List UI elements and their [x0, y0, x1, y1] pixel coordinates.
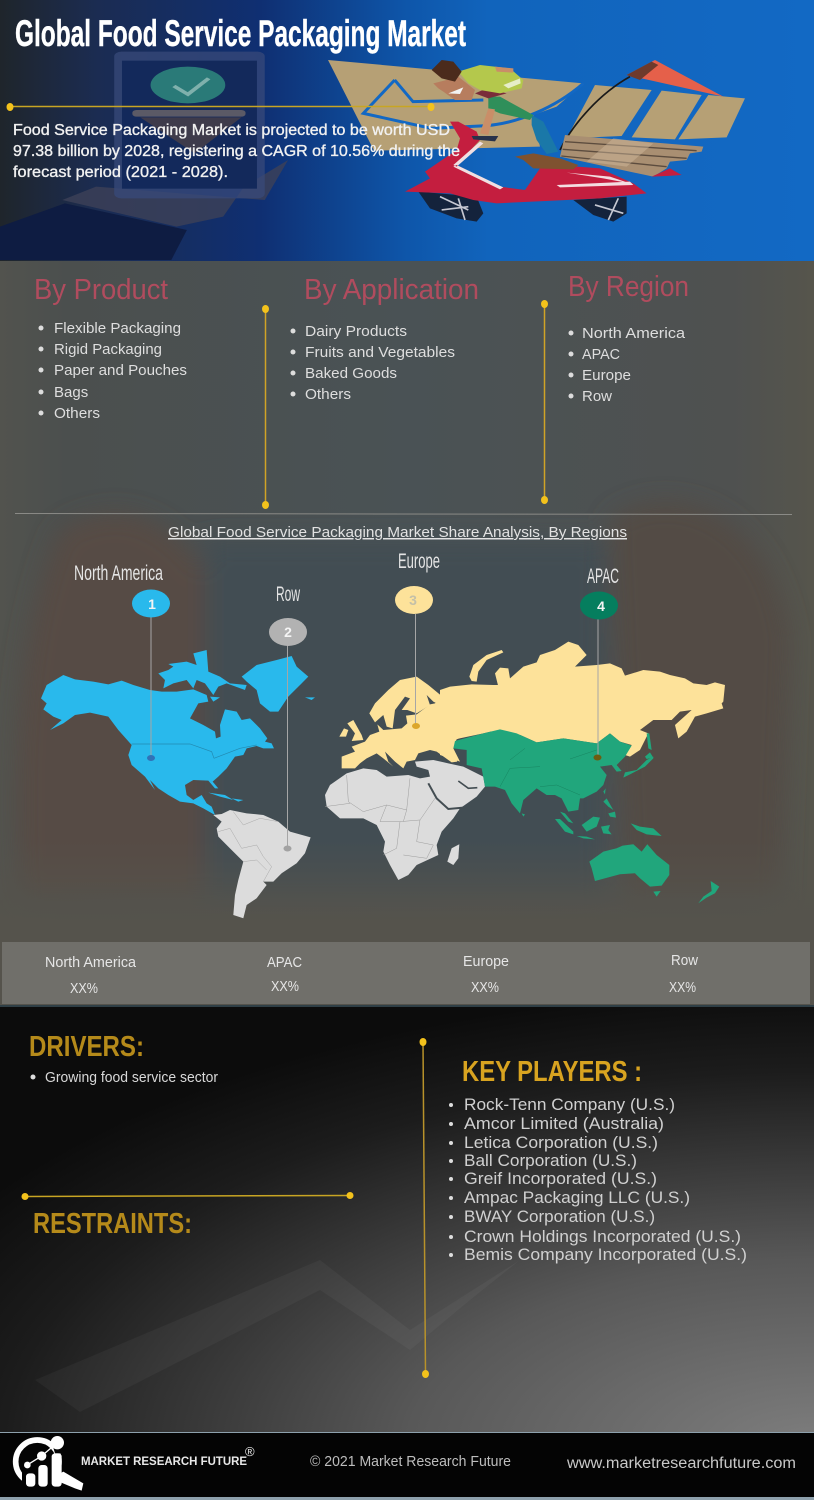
pin: Europe: 3: [409, 592, 417, 608]
map: South America: [213, 810, 311, 918]
player list: [449, 1096, 747, 1264]
map: Africa and Middle East: [325, 760, 485, 880]
list: Fruits and Vegetables: [305, 344, 455, 361]
list: Rigid Packaging: [54, 341, 162, 358]
list: Dairy Products: [305, 323, 407, 340]
copyright: © 2021 Market Research Future: [310, 1454, 511, 1470]
player list: Crown Holdings Incorporated (U.S.): [464, 1228, 741, 1246]
APAC share: XX%: [271, 979, 299, 995]
title: Global Food Service Packaging Market: [15, 13, 466, 54]
list: APAC: [582, 346, 620, 363]
flag: [560, 60, 723, 150]
divider: product and application: [262, 305, 269, 509]
icon: market research future logo: [16, 1436, 83, 1491]
drivers: [29, 1031, 218, 1086]
list: Others: [305, 386, 351, 403]
player list: Rock-Tenn Company (U.S.): [464, 1096, 675, 1114]
label: Row: [276, 583, 300, 606]
scooter body: [405, 122, 647, 203]
player list: Bemis Company Incorporated (U.S.): [464, 1246, 747, 1264]
label: Europe: [398, 550, 440, 573]
pin: North America: 1: [148, 596, 156, 612]
Europe share: Europe: [463, 954, 509, 970]
column: by region: [568, 271, 689, 405]
heading: By Application: [304, 274, 479, 306]
player list: Greif Incorporated (U.S.): [464, 1170, 657, 1188]
label: North America: [74, 562, 163, 585]
intro text: [13, 122, 460, 181]
North America share: XX%: [70, 981, 98, 997]
Row share: Row: [671, 953, 698, 969]
Row share: XX%: [669, 980, 696, 996]
footer: [0, 1432, 814, 1500]
vertical divider: [420, 1038, 429, 1378]
rider: [432, 60, 558, 154]
player list: Letica Corporation (U.S.): [464, 1134, 658, 1152]
player list: Amcor Limited (Australia): [464, 1115, 664, 1133]
world map: [41, 642, 725, 918]
divider with dots: [6, 103, 434, 111]
map: Asia Pacific: [453, 729, 719, 903]
list: Flexible Packaging: [54, 320, 181, 337]
chart heading: Global Food Service Packaging Market Share Analysis, By Regions: [168, 524, 627, 541]
brand name: MARKET RESEARCH FUTURE: [81, 1454, 247, 1468]
pin: APAC: [580, 565, 619, 760]
Europe share: [463, 954, 509, 996]
website: www.marketresearchfuture.com: [566, 1455, 796, 1472]
list: Europe: [582, 367, 631, 384]
pizza boxes: [560, 135, 703, 177]
list: [290, 323, 455, 403]
intro text: Food Service Packaging Market is projected to be worth USD: [13, 122, 450, 139]
heading: By Region: [568, 271, 689, 303]
pin: Row: 2: [284, 624, 292, 640]
player list: Ball Corporation (U.S.): [464, 1152, 637, 1170]
horizontal divider: [22, 1192, 354, 1200]
pin: Europe: [395, 550, 440, 729]
list: North America: [582, 325, 686, 342]
list: [38, 320, 187, 422]
heading: By Product: [34, 274, 168, 306]
key players: [449, 1056, 747, 1264]
panel: segments and map background: [0, 261, 814, 1005]
wheels: [418, 192, 627, 222]
intro text: forecast period (2021 - 2028).: [13, 164, 228, 181]
list: Baked Goods: [305, 365, 397, 382]
restraints heading: RESTRAINTS:: [33, 1208, 192, 1240]
list: Bags: [54, 384, 88, 401]
North America share: North America: [45, 955, 137, 971]
map: North America: [41, 650, 315, 815]
heading: DRIVERS:: [29, 1031, 144, 1063]
pin: Row: [269, 583, 307, 852]
Europe share: XX%: [471, 980, 499, 996]
label: APAC: [587, 565, 619, 588]
column: by product: [34, 274, 187, 422]
pin: North America: [74, 562, 170, 761]
panel: drivers, restraints and key players: [0, 1005, 814, 1432]
driver item: Growing food service sector: [45, 1070, 218, 1086]
column: by application: [290, 274, 479, 403]
Row share: [669, 953, 698, 996]
tan stripes: [567, 85, 745, 139]
table: regional shares: [2, 942, 810, 1004]
icon: phone in hand silhouette: [0, 52, 288, 260]
registered mark: ®: [245, 1444, 255, 1459]
intro text: 97.38 billion by 2028, registering a CAGR of 10.56% during the: [13, 143, 460, 160]
divider: application and region: [541, 300, 548, 504]
heading: KEY PLAYERS :: [462, 1056, 642, 1088]
panel: hero banner: [0, 0, 814, 261]
list: Paper and Pouches: [54, 362, 187, 379]
player list: BWAY Corporation (U.S.): [464, 1208, 655, 1226]
tan arrow: [328, 60, 583, 151]
list: Others: [54, 405, 100, 422]
list: [568, 325, 686, 405]
North America share: [45, 955, 137, 997]
APAC share: APAC: [267, 955, 302, 971]
pin: APAC: 4: [597, 598, 605, 614]
icon: delivery scooter illustration: [328, 60, 745, 222]
player list: Ampac Packaging LLC (U.S.): [464, 1189, 690, 1207]
list: Row: [582, 388, 612, 405]
APAC share: [267, 955, 302, 995]
map: Europe and Russia: [339, 642, 725, 768]
